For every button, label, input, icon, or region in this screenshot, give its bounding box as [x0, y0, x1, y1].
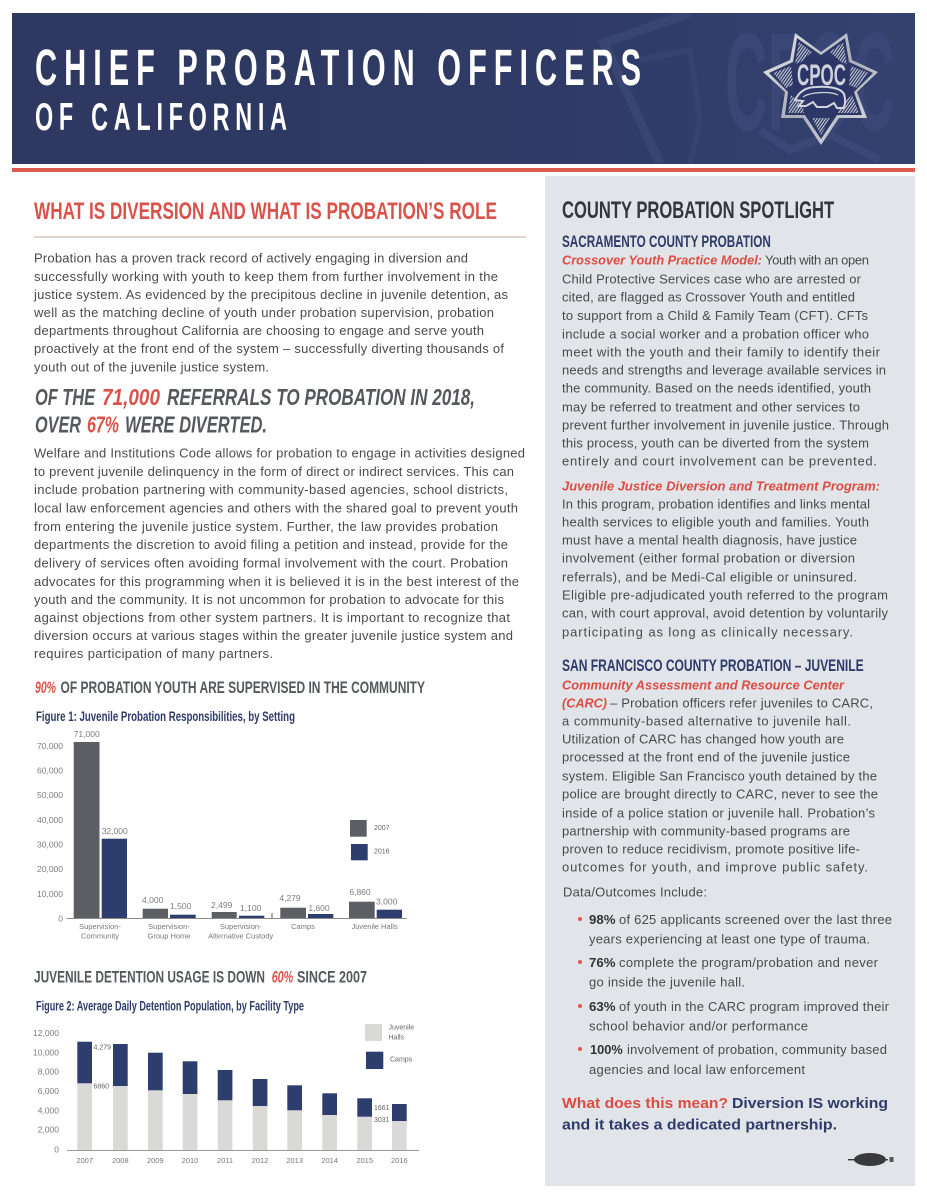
- text block: welfare and institutions code: against objections from other system partners. It is important to recognize that: [34, 610, 510, 625]
- heading: juvenile detention down 60%: JUVENILE DETENTION USAGE IS DOWN: [34, 968, 265, 987]
- bullet list: outcomes: involvement of probation, community based: [627, 1042, 887, 1057]
- label: data outcomes: Data/Outcomes Include:: [563, 885, 707, 900]
- y axis labels: 10,000: [33, 1047, 59, 1057]
- y axis labels: 0: [54, 1144, 59, 1154]
- text block: intro paragraph: [33, 251, 508, 374]
- callout: what does this mean: [562, 1095, 888, 1134]
- callout: 71,000 referrals: 71,000: [102, 384, 160, 410]
- text block: community assessment and resource center: police are brought directly to CARC, never to see the: [562, 786, 878, 802]
- category labels: Supervision-: [79, 922, 121, 931]
- y axis labels: [33, 1028, 59, 1154]
- title: [35, 39, 641, 138]
- category labels: Community: [81, 932, 119, 940]
- value labels: 1,100: [240, 903, 262, 913]
- text block: community assessment and resource center: [562, 678, 878, 874]
- figure 2 title: Figure 2: Average Daily Detention Population, by Facility Type: [36, 999, 304, 1014]
- legend: Halls: [388, 1034, 405, 1042]
- text block: welfare and institutions code: Welfare and Institutions Code allows for probation to engage in activities designed: [34, 446, 525, 460]
- stacked bar chart: figure 2: [33, 1024, 419, 1165]
- text block: juvenile justice diversion and treatment: Eligible pre-adjudicated youth referred to the program: [562, 588, 888, 602]
- text block: crossover youth practice model: entirely and court involvement can be prevented.: [562, 454, 877, 468]
- value labels: 6,860: [349, 887, 371, 897]
- text block: crossover youth practice model: to support from a Child & Family Team (CFT). CFTs: [562, 308, 868, 323]
- text block: community assessment and resource center: a community-based alternative to juvenile hall.: [562, 714, 851, 728]
- bullet list: outcomes: go inside the juvenile hall.: [589, 975, 745, 990]
- legend: Camps: [390, 1056, 413, 1064]
- text block: juvenile justice diversion and treatment: Juvenile Justice Diversion and Treatment Program:: [562, 480, 880, 494]
- legend: [365, 1024, 414, 1069]
- y axis labels: 20,000: [37, 864, 63, 874]
- heading: juvenile detention down 60%: 60%: [272, 968, 293, 987]
- heading: spotlight: COUNTY PROBATION SPOTLIGHT: [562, 197, 834, 224]
- value labels: 3031: [374, 1117, 390, 1124]
- title: CHIEF PROBATION OFFICERS: [35, 39, 641, 96]
- y axis labels: 60,000: [37, 766, 63, 776]
- year labels: 2013: [286, 1156, 303, 1165]
- text block: community assessment and resource center: Utilization of CARC has changed how youth are: [562, 732, 844, 746]
- y axis labels: 10,000: [37, 889, 63, 899]
- text block: welfare and institutions code: youth and the community. It is not uncommon for probation to advocate for this: [34, 592, 504, 607]
- category labels: Supervision-: [148, 922, 190, 931]
- subheading: sacramento: SACRAMENTO COUNTY PROBATION: [562, 233, 771, 252]
- text block: juvenile justice diversion and treatment: In this program, probation identifies and links mental: [562, 496, 870, 512]
- text block: crossover youth practice model: this process, youth can be diverted from the system: [562, 436, 869, 450]
- callout: 71,000 referrals: WERE DIVERTED.: [125, 412, 267, 438]
- category labels: Camps: [291, 922, 315, 931]
- value labels: 2,499: [211, 900, 233, 910]
- value labels: 3,000: [376, 897, 398, 907]
- heading: juvenile detention down 60%: SINCE 2007: [297, 968, 367, 987]
- text block: welfare and institutions code: [34, 446, 525, 661]
- heading: 90% supervised in community: 90%: [35, 679, 56, 697]
- year labels: 2010: [182, 1156, 198, 1165]
- text block: crossover youth practice model: Child Protective Services case who are arrested or: [562, 272, 862, 286]
- callout: 71,000 referrals: OF THE: [35, 384, 95, 410]
- text block: crossover youth practice model: [562, 252, 889, 468]
- text block: crossover youth practice model: needs and strengths and leverage available services in: [562, 362, 886, 378]
- year labels: 2007: [76, 1156, 93, 1165]
- bullet list: outcomes: 76%: [589, 955, 616, 970]
- year labels: 2011: [217, 1156, 233, 1165]
- red rule: [12, 168, 915, 172]
- bullet list: outcomes: of youth in the CARC program improved their: [619, 999, 890, 1014]
- y axis labels: 4,000: [38, 1105, 59, 1115]
- title: OF CALIFORNIA: [35, 95, 287, 138]
- value labels: 1661: [374, 1105, 390, 1112]
- panel: county probation spotlight: [545, 176, 915, 1186]
- text block: welfare and institutions code: delivery of services often avoiding formal involvement with the court. Probation: [34, 556, 508, 570]
- bars: camps: [77, 1042, 407, 1121]
- text block: community assessment and resource center: Community Assessment and Resource Center: [562, 678, 845, 692]
- text block: community assessment and resource center: – Probation officers refer juveniles to CARC,: [610, 696, 873, 710]
- text block: juvenile justice diversion and treatment: referrals), and be Medi-Cal eligible or uninsured.: [562, 570, 857, 584]
- y axis labels: 30,000: [37, 840, 63, 850]
- year labels: [76, 1156, 408, 1165]
- text block: welfare and institutions code: to prevent juvenile delinquency in the form of direct or indirect services. This can: [34, 464, 514, 479]
- bullet list: outcomes: complete the program/probation and never: [619, 955, 879, 970]
- text block: intro paragraph: Probation has a proven track record of actively engaging in diversion and: [34, 251, 468, 266]
- text block: juvenile justice diversion and treatment: can, with court approval, avoid detention by voluntarily: [562, 606, 888, 620]
- header banner: [12, 3, 915, 164]
- text block: community assessment and resource center: outcomes for youth, and improve public safety.: [562, 860, 868, 874]
- bullet list: outcomes: years experiencing at least one type of trauma.: [589, 931, 870, 946]
- y axis labels: [37, 741, 63, 924]
- bullet list: outcomes: [578, 912, 892, 1077]
- text block: crossover youth practice model: meet with the youth and their family to identify their: [562, 344, 881, 360]
- year labels: 2015: [356, 1156, 373, 1165]
- bar chart: figure 1: [37, 729, 407, 940]
- text block: community assessment and resource center: system. Eligible San Francisco youth detained by the: [562, 768, 877, 784]
- text block: juvenile justice diversion and treatment: must have a mental health diagnosis, have justice: [562, 532, 857, 548]
- text block: welfare and institutions code: requires participation of many partners.: [34, 646, 273, 661]
- subheading: san francisco: SAN FRANCISCO COUNTY PROBATION – JUVENILE: [562, 657, 864, 676]
- text block: community assessment and resource center: partnership with community-based programs are: [562, 824, 850, 838]
- icon: small printer's mark: [848, 1153, 894, 1166]
- text block: crossover youth practice model: include a social worker and a probation officer who: [562, 326, 869, 342]
- bullet list: outcomes: school behavior and/or performance: [589, 1019, 808, 1034]
- value labels: [74, 729, 398, 913]
- legend: 2016: [374, 848, 390, 856]
- text block: intro paragraph: proactively at the front end of the system – successfully diverting thousands of: [34, 341, 504, 356]
- text block: juvenile justice diversion and treatment: health services to eligible youth and families. Youth: [562, 514, 869, 530]
- text block: intro paragraph: successfully working with youth to keep them from further involvement in the: [34, 269, 498, 284]
- heading: 90% supervised in community: OF PROBATION YOUTH ARE SUPERVISED IN THE COMMUNITY: [60, 679, 425, 697]
- year labels: 2016: [391, 1156, 408, 1165]
- heading: what is diversion: WHAT IS DIVERSION AND WHAT IS PROBATION’S ROLE: [34, 198, 497, 225]
- callout: 71,000 referrals: REFERRALS TO PROBATION IN 2018,: [167, 384, 475, 410]
- text block: crossover youth practice model: the community. Based on the needs identified, youth: [562, 380, 871, 396]
- text block: crossover youth practice model: cited, are flagged as Crossover Youth and entitled: [562, 290, 855, 304]
- y axis labels: 70,000: [37, 741, 63, 751]
- bullet list: outcomes: 63%: [589, 999, 616, 1014]
- value labels: 1,500: [170, 901, 192, 911]
- value labels: 4,279: [94, 1044, 111, 1052]
- bars: 2007: [74, 742, 375, 918]
- year labels: 2012: [252, 1156, 268, 1165]
- category labels: [79, 922, 398, 940]
- text block: community assessment and resource center: inside of a police station or juvenile hall. Probation’s: [562, 806, 876, 820]
- y axis labels: 6,000: [38, 1086, 59, 1096]
- callout: what does this mean: and it takes a dedicated partnership.: [562, 1116, 837, 1134]
- callout: what does this mean: Diversion IS working: [732, 1095, 888, 1112]
- value labels: 71,000: [74, 729, 100, 739]
- bars: juvenile halls: [77, 1083, 407, 1150]
- left column: diversion section: [33, 198, 526, 661]
- text block: intro paragraph: justice system. As evidenced by the precipitous decline in juvenile detention, as: [33, 287, 508, 302]
- heading: 90% supervised in community: [35, 679, 425, 697]
- bars: 2016: [102, 839, 402, 918]
- bullet list: outcomes: 100%: [590, 1042, 623, 1057]
- text block: welfare and institutions code: diversion occurs at various stages within the greater juvenile justice system and: [34, 628, 513, 643]
- text block: welfare and institutions code: from entering the juvenile justice system. Further, the law provides probation: [34, 519, 498, 534]
- value labels: 4,000: [142, 895, 164, 905]
- value labels: 32,000: [102, 826, 128, 836]
- icon: CPOC star badge: [763, 33, 878, 145]
- year labels: 2014: [321, 1156, 338, 1165]
- text block: juvenile justice diversion and treatment: involvement (either formal probation or diversion: [562, 550, 855, 566]
- y axis labels: 40,000: [37, 815, 63, 825]
- value labels: 1,600: [308, 903, 330, 913]
- callout: 71,000 referrals: OVER: [35, 412, 81, 438]
- callout: what does this mean: What does this mean?: [562, 1095, 728, 1112]
- category labels: Alternative Custody: [208, 932, 273, 940]
- category labels: Group Home: [148, 932, 190, 940]
- text block: intro paragraph: well as the matching decline of youth under probation supervision, probation: [33, 305, 494, 320]
- legend: Juvenile: [388, 1024, 414, 1032]
- figure 1 title: Figure 1: Juvenile Probation Responsibilities, by Setting: [36, 709, 295, 724]
- y axis labels: 0: [58, 914, 63, 924]
- text block: welfare and institutions code: local law enforcement agencies and others with the shared goal to prevent youth: [34, 500, 518, 516]
- text block: crossover youth practice model: prevent further involvement in juvenile justice. Through: [562, 418, 889, 432]
- text block: crossover youth practice model: may be referred to treatment and other services to: [562, 400, 860, 414]
- callout: 71,000 referrals: [35, 384, 475, 438]
- text block: crossover youth practice model: Crossover Youth Practice Model:: [562, 254, 762, 268]
- y axis labels: 12,000: [33, 1028, 59, 1038]
- bullet list: outcomes: agencies and local law enforcement: [589, 1062, 805, 1077]
- value labels: 6860: [94, 1084, 109, 1090]
- year labels: 2008: [112, 1156, 129, 1165]
- text block: welfare and institutions code: advocates for this programming when it is believed it is in the best interest of the: [34, 574, 519, 589]
- callout: 71,000 referrals: 67%: [87, 412, 119, 438]
- year labels: 2009: [147, 1156, 164, 1165]
- text block: community assessment and resource center: (CARC): [562, 696, 607, 710]
- category labels: Supervision-: [220, 922, 262, 931]
- text block: juvenile justice diversion and treatment: [562, 480, 888, 640]
- value labels: [94, 1044, 390, 1124]
- text block: welfare and institutions code: include probation partnering with community-based agencies, school districts,: [34, 482, 508, 497]
- text block: juvenile justice diversion and treatment: participating as long as clinically necessary.: [562, 624, 853, 640]
- text block: community assessment and resource center: proven to reduce recidivism, promote positive life-: [562, 842, 860, 856]
- y axis labels: 8,000: [38, 1066, 59, 1076]
- bullet list: outcomes: 98%: [589, 912, 616, 927]
- text block: intro paragraph: departments throughout California are choosing to engage and serve youth: [34, 323, 484, 338]
- category labels: Juvenile Halls: [351, 922, 398, 931]
- text block: crossover youth practice model: Youth with an open: [765, 252, 869, 268]
- y axis labels: 50,000: [37, 790, 63, 800]
- legend: [350, 820, 390, 860]
- value labels: 4,279: [279, 893, 301, 903]
- text block: welfare and institutions code: departments the discretion to avoid filing a petition and instead, provide for the: [34, 537, 508, 552]
- text block: community assessment and resource center: processed at the front end of the juvenile justice: [562, 750, 850, 764]
- y axis labels: 2,000: [38, 1124, 59, 1134]
- watermark: badge and letters: [604, 3, 895, 164]
- icon: CPOC star badge: CPOC: [797, 59, 846, 92]
- text block: intro paragraph: youth out of the juvenile justice system.: [34, 360, 269, 374]
- legend: 2007: [374, 825, 390, 832]
- bullet list: outcomes: of 625 applicants screened over the last three: [619, 912, 892, 927]
